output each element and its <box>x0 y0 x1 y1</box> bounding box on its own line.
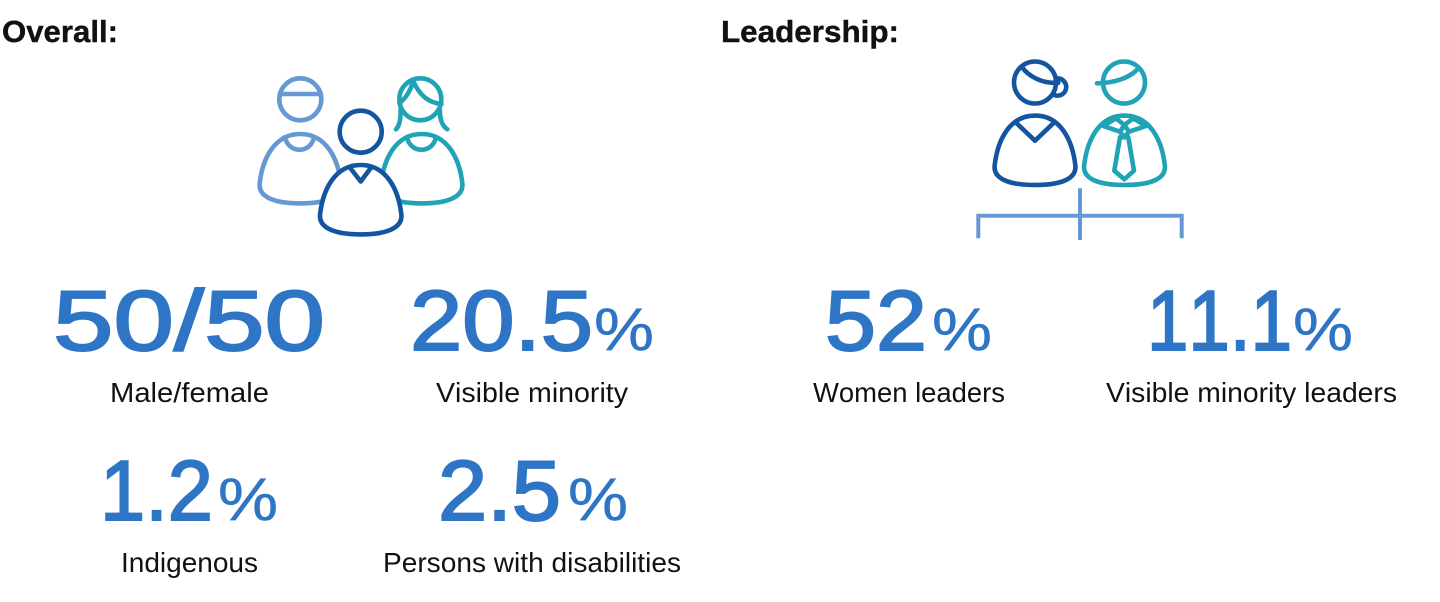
stat: visible minority leaders: % <box>1293 296 1353 363</box>
label: women leaders: Women leaders <box>813 377 1005 408</box>
icon: organisation bracket <box>978 188 1182 240</box>
stat: visible minority <box>410 274 654 408</box>
panel: leadership <box>721 14 1397 408</box>
icon: man leader with tie <box>1084 62 1165 185</box>
icon: group of three people <box>260 78 462 234</box>
icon: person in front <box>320 111 401 234</box>
stat: male/female <box>53 274 325 408</box>
stat: visible minority leaders <box>1106 274 1397 408</box>
icon: woman leader <box>995 62 1075 185</box>
stat: women leaders: % <box>932 296 992 363</box>
stat: indigenous: 1.2 <box>100 444 213 539</box>
heading: overall: Overall: <box>2 14 118 49</box>
label: persons with disabilities: Persons with disabilities <box>383 547 681 578</box>
panel: overall <box>2 14 681 578</box>
stat: indigenous <box>100 444 278 578</box>
stat: persons with disabilities: 2.5 <box>438 444 561 539</box>
stat: persons with disabilities <box>383 444 681 578</box>
icon: person with long hair <box>381 78 462 203</box>
icon: person with cap <box>260 78 341 203</box>
label: visible minority: Visible minority <box>436 377 628 408</box>
stat: visible minority: 20.5 <box>410 274 593 369</box>
icon: two leaders on a bracket <box>978 62 1182 240</box>
stat: women leaders: 52 <box>825 274 927 369</box>
stat: women leaders <box>813 274 1005 408</box>
stat: male/female: 50/50 <box>53 274 325 369</box>
stat: visible minority: % <box>594 296 654 363</box>
label: indigenous: Indigenous <box>121 547 258 578</box>
stat: persons with disabilities: % <box>568 466 628 533</box>
heading: leadership: Leadership: <box>721 14 899 49</box>
label: visible minority leaders: Visible minority leaders <box>1106 377 1397 408</box>
label: male/female: Male/female <box>110 377 269 408</box>
stat: visible minority leaders: 11.1 <box>1147 274 1292 369</box>
stat: indigenous: % <box>218 466 278 533</box>
